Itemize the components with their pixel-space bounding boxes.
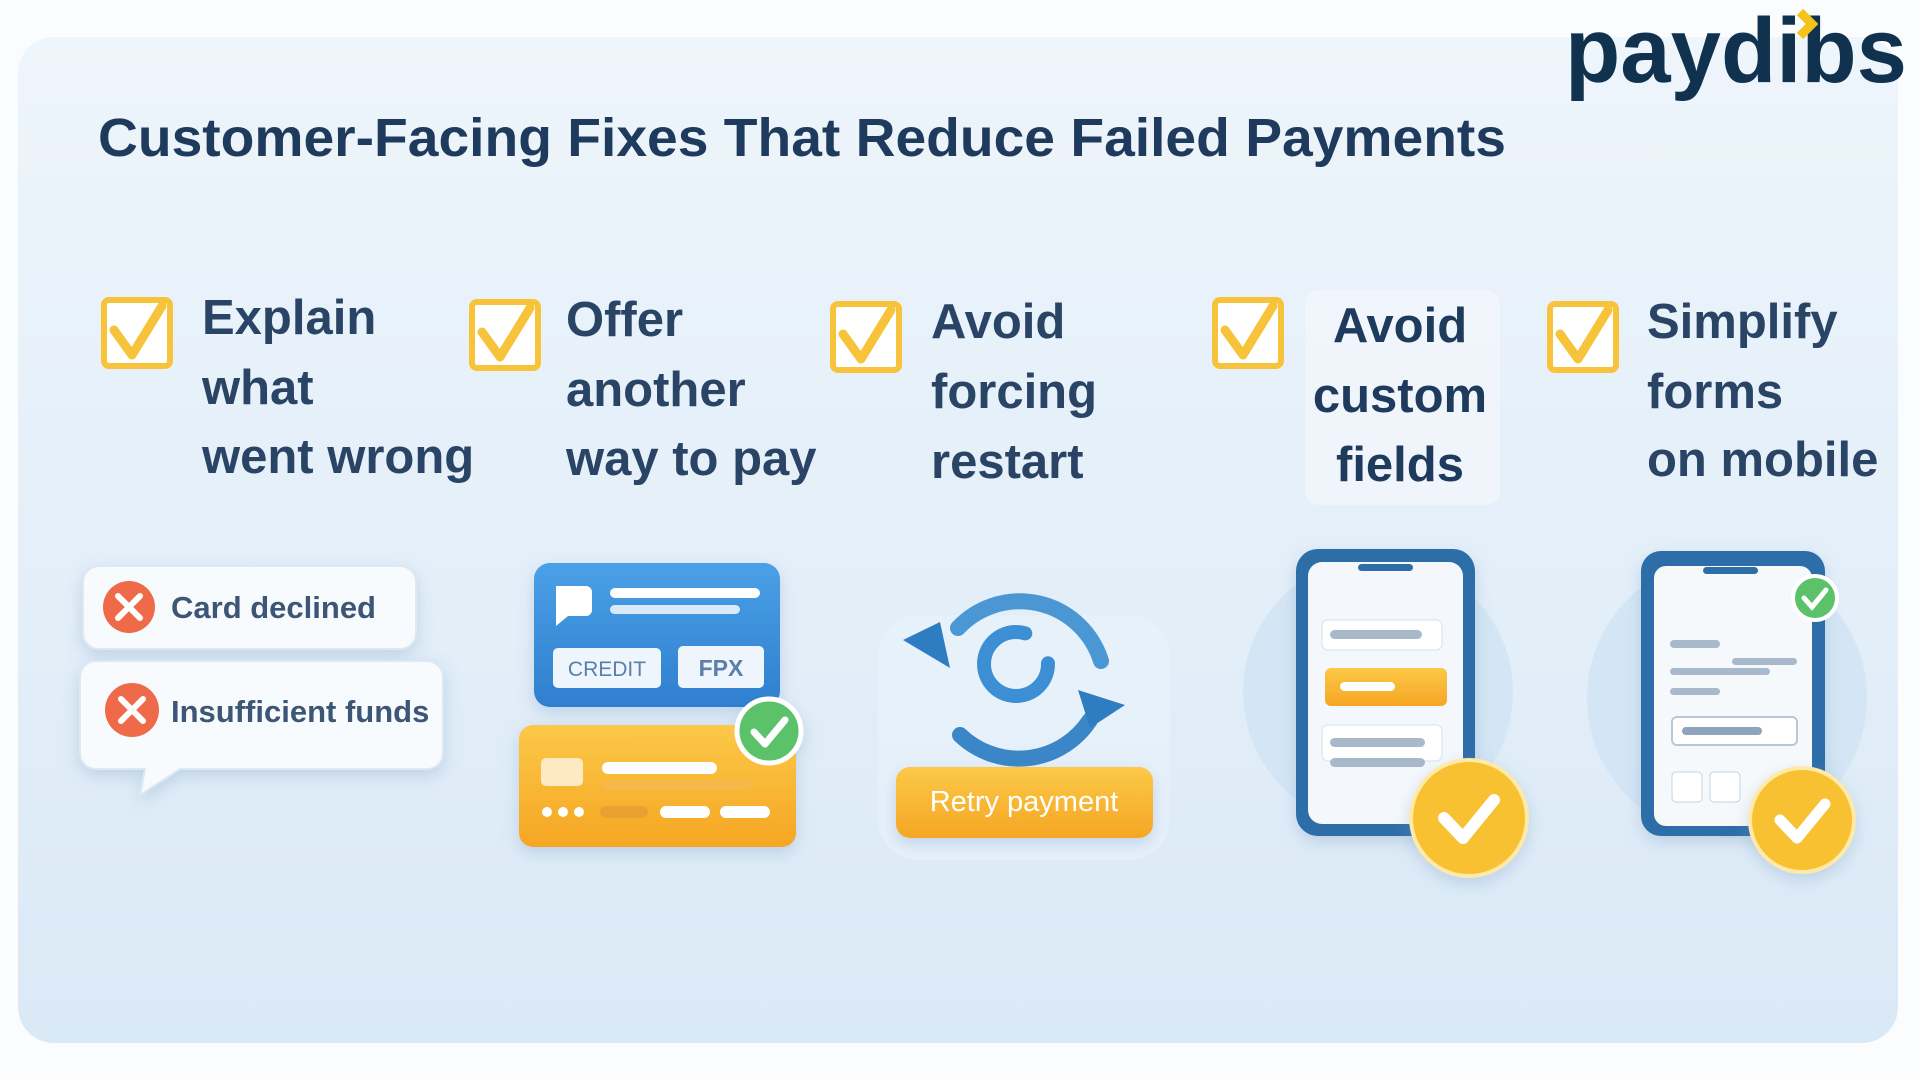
text: custom fields: Avoid (1333, 299, 1467, 353)
illustration: phone with fields (1243, 549, 1527, 876)
icon: checkbox 1 (104, 300, 170, 366)
card: blue payment options (534, 563, 780, 707)
text: avoid restart: restart (931, 435, 1084, 489)
text: explain: what (201, 361, 314, 415)
column 4: custom fields (1215, 290, 1500, 505)
card: orange card (519, 725, 796, 847)
text: explain: went wrong (201, 430, 474, 484)
icon: yellow check 1 (1411, 760, 1527, 876)
column 2: offer (472, 293, 817, 486)
icon: checkbox 2 (472, 302, 538, 368)
bubble: card declined: Card declined (171, 590, 376, 625)
text: simplify forms: forms (1647, 365, 1783, 419)
icon: checkbox 3 (833, 304, 899, 370)
illustration: mobile form (1587, 551, 1867, 872)
title: Customer-Facing Fixes That Reduce Failed Payments (98, 108, 1506, 168)
card: blue payment options: FPX (699, 655, 744, 681)
bubble: insufficient funds (80, 661, 443, 795)
text: avoid restart: Avoid (931, 295, 1065, 349)
illustration: payment cards (519, 563, 801, 847)
icon: small green check (1793, 576, 1837, 620)
column 5: simplify forms (1550, 295, 1878, 487)
bubble: insufficient funds: Insufficient funds (171, 694, 429, 729)
illustration: retry (878, 601, 1170, 860)
column 3: avoid restart (833, 295, 1097, 489)
text: custom fields (1305, 290, 1500, 505)
text: offer: way to pay (565, 432, 817, 486)
button: retry payment (896, 767, 1153, 838)
column 1: explain (104, 291, 474, 484)
text: simplify forms: Simplify (1647, 295, 1838, 349)
icon: yellow check 2 (1750, 768, 1854, 872)
phone 2 (1641, 551, 1825, 836)
text: offer: Offer (566, 293, 683, 347)
phone 1 (1296, 549, 1475, 836)
icon: checkbox 5 (1550, 304, 1616, 370)
card: blue payment options: CREDIT (568, 658, 646, 681)
icon: green check (737, 699, 801, 763)
text: explain: Explain (202, 291, 376, 345)
icon: checkbox 4 (1215, 300, 1281, 366)
illustration: error bubbles (80, 566, 443, 795)
text: custom fields: custom (1313, 369, 1487, 423)
logo: paydibs: paydibs (1565, 0, 1907, 102)
text: avoid restart: forcing (931, 365, 1097, 419)
text: custom fields: fields (1336, 438, 1464, 492)
text: simplify forms: on mobile (1647, 433, 1878, 487)
icon: circular arrows (958, 601, 1101, 759)
button: retry payment: Retry payment (930, 786, 1118, 818)
text: offer: another (566, 363, 746, 417)
bubble: card declined (83, 566, 416, 649)
